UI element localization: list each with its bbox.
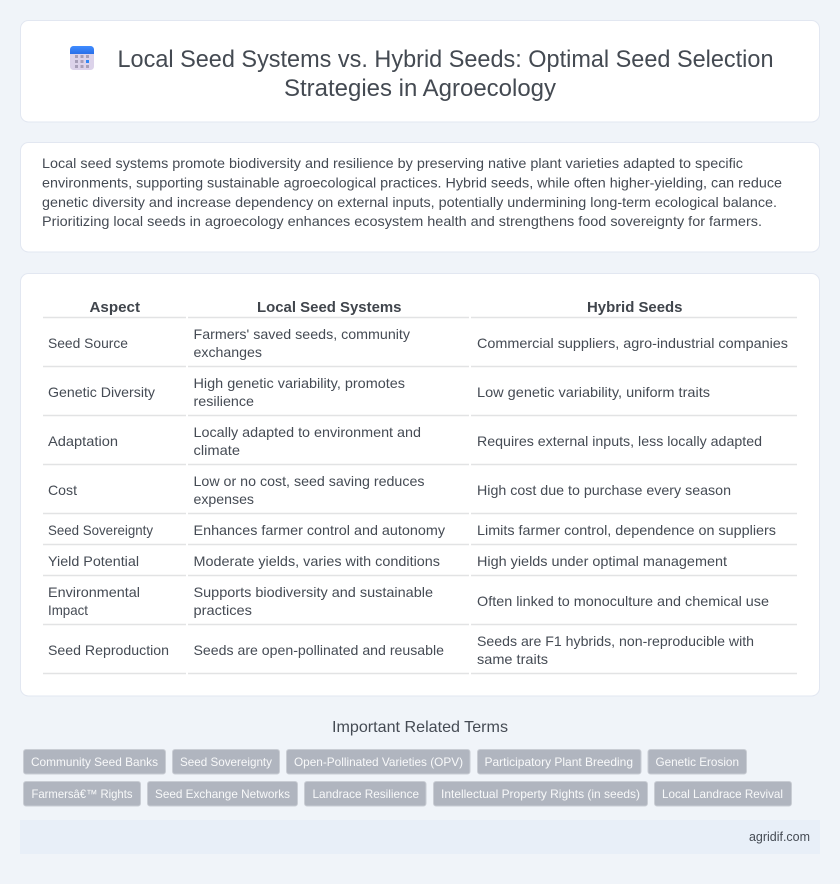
row: genetic diversity: Genetic Diversity [48,384,155,400]
row: environmental impact: Impact [48,602,88,618]
row: environmental impact: Supports biodiversity and sustainable [194,584,433,600]
row: genetic diversity [43,375,797,416]
row: seed sovereignty: Enhances farmer control and autonomy [194,522,445,538]
row: environmental impact: Environmental [48,584,140,600]
row: cost: expenses [194,491,254,507]
heading: important related terms: Important Related Terms [332,719,508,736]
row: adaptation [43,424,797,464]
row: cost: Cost [48,482,77,498]
row: seed source: Farmers' saved seeds, community [194,326,410,342]
panel: summary text [20,142,820,252]
tag: genetic erosion: Genetic Erosion [656,755,739,769]
table header row: Aspect [90,299,140,316]
row: seed sovereignty: Limits farmer control, dependence on suppliers [477,522,776,538]
tag: landrace resilience [304,782,426,806]
tag: landrace resilience: Landrace Resilience [312,787,419,801]
row: seed source: Commercial suppliers, agro-industrial companies [477,335,788,351]
panel: summary text: environments, supporting sustainable agroecological practices. Hybrid seeds, while often higher-yielding, can reduce [42,174,782,190]
table header row: Local Seed Systems [257,299,402,316]
tag: seed sovereignty: Seed Sovereignty [180,755,272,769]
row: adaptation: climate [194,442,240,458]
row: yield potential: Moderate yields, varies with conditions [194,553,440,569]
title [118,46,774,102]
row: adaptation: Requires external inputs, less locally adapted [477,433,762,449]
icon: calendar [70,46,94,70]
row: cost: Low or no cost, seed saving reduces [194,473,424,489]
tag: local landrace revival [654,782,792,806]
row: seed source [43,326,797,366]
row: cost [43,473,797,514]
row: adaptation: Locally adapted to environment and [194,424,421,440]
panel: summary text: Local seed systems promote biodiversity and resilience by preserving native plant varieties adapted to specific [42,155,743,171]
tag: farmers rights [24,782,140,806]
row: seed reproduction: Seeds are F1 hybrids, non-reproducible with [477,633,754,649]
row: seed reproduction: same traits [477,651,548,667]
tag: genetic erosion [648,750,746,774]
row: environmental impact [43,584,797,624]
tag: participatory plant breeding [478,750,641,774]
title: Local Seed Systems vs. Hybrid Seeds: Optimal Seed Selection [118,46,774,73]
panel: summary text: genetic diversity and increase dependency on external inputs, potentially undermining long-term ecological balance. [42,194,777,210]
table header row [43,299,797,318]
row: genetic diversity: High genetic variability, promotes [194,375,405,391]
panel: comparison table [20,274,820,696]
row: seed reproduction: Seed Reproduction [48,642,169,658]
tag: seed sovereignty [172,750,280,774]
row: adaptation: Adaptation [48,433,118,449]
row: seed sovereignty [43,522,797,544]
tag: intellectual property rights [434,782,648,806]
tag: intellectual property rights: Intellectual Property Rights (in seeds) [441,787,640,801]
row: seed source: Seed Source [48,335,128,351]
row: yield potential: Yield Potential [48,553,139,569]
tag: participatory plant breeding: Participatory Plant Breeding [484,755,633,769]
panel: header [20,20,820,122]
row: cost: High cost due to purchase every season [477,482,731,498]
footer [20,820,820,854]
row: genetic diversity: Low genetic variability, uniform traits [477,384,710,400]
tag: open-pollinated varieties [286,750,470,774]
row: environmental impact: practices [194,602,252,618]
tag: community seed banks [24,750,166,774]
table header row: Hybrid Seeds [587,299,682,316]
row: seed reproduction [43,633,797,674]
row: seed source: exchanges [194,344,262,360]
related term tags [24,750,792,806]
tag: community seed banks: Community Seed Banks [31,755,158,769]
title: Strategies in Agroecology [284,75,557,102]
row: genetic diversity: resilience [194,393,254,409]
tag: local landrace revival: Local Landrace Revival [662,787,783,801]
row: yield potential: High yields under optimal management [477,553,727,569]
tag: open-pollinated varieties: Open-Pollinated Varieties (OPV) [294,755,463,769]
tag: seed exchange networks: Seed Exchange Networks [155,787,290,801]
tag: farmers rights: Farmersâ€™ Rights [32,787,132,801]
row: environmental impact: Often linked to monoculture and chemical use [477,593,769,609]
row: yield potential [43,553,797,576]
tag: seed exchange networks [148,782,298,806]
footer: agridif.com [749,830,810,844]
row: seed sovereignty: Seed Sovereignty [48,522,153,538]
panel: summary text: Prioritizing local seeds in agroecology enhances ecosystem health and strengthens food sovereignty for farmers. [42,213,762,229]
row: seed reproduction: Seeds are open-pollinated and reusable [194,642,444,658]
